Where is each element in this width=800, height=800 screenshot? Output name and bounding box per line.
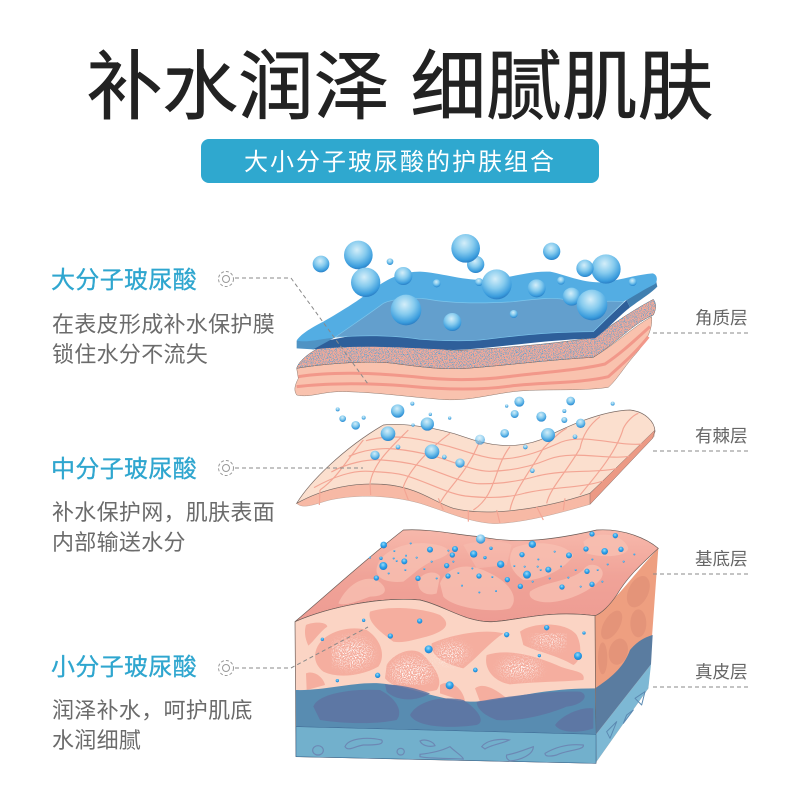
leader line	[235, 467, 363, 469]
layer: spinous layer illustration	[297, 397, 655, 524]
description: large molecule: 锁住水分不流失	[52, 342, 208, 367]
subtitle banner: 大小分子玻尿酸的护肤组合	[244, 149, 556, 176]
blue dermis band	[296, 683, 596, 734]
layer label: basal layer: 基底层	[695, 549, 748, 569]
sheet right edge	[627, 281, 657, 307]
leader target icon	[218, 272, 234, 286]
description: small molecule: 水润细腻	[52, 728, 141, 753]
panel: medium molecule label	[51, 456, 363, 555]
speckled sheet edge	[297, 337, 335, 349]
right cut face	[590, 430, 655, 504]
blue hydration sheet	[297, 272, 657, 341]
dark blue band	[300, 300, 630, 350]
panel: small molecule label	[51, 627, 368, 753]
layer label: spinous layer	[653, 426, 750, 451]
sheet top surface	[297, 410, 655, 512]
layer: basal layer and dermis block	[295, 530, 658, 763]
lower squiggles	[313, 738, 583, 761]
heading: medium molecule: 中分子玻尿酸	[51, 456, 197, 483]
layer label: spinous layer: 有棘层	[695, 426, 748, 446]
description: medium molecule: 补水保护网，肌肤表面	[52, 500, 275, 525]
layer label: dermis: 真皮层	[695, 662, 748, 682]
layer label: dermis	[653, 662, 750, 687]
bubbles: medium molecule	[336, 397, 615, 473]
layer: stratum corneum illustration	[295, 234, 657, 400]
small molecule dots: surface	[369, 531, 635, 593]
layer label: basal layer	[653, 549, 750, 574]
title: 补水润泽 细腻肌肤	[87, 45, 713, 130]
small molecule dots: front face	[321, 618, 586, 689]
heading: small molecule: 小分子玻尿酸	[51, 654, 197, 681]
block front face	[295, 599, 596, 763]
block top surface	[295, 530, 658, 622]
leader line	[235, 278, 368, 384]
leader target icon	[218, 460, 234, 476]
sheet underside	[297, 432, 655, 524]
leader target icon	[218, 660, 234, 676]
description: small molecule: 润泽补水，呵护肌底	[52, 698, 253, 723]
dermis dark cells	[313, 684, 593, 732]
bubbles: large molecule	[313, 234, 637, 331]
layer label: stratum corneum: 角质层	[695, 308, 748, 328]
bottom blue layer	[296, 727, 596, 763]
cell texture	[332, 633, 567, 684]
block right side	[595, 548, 658, 762]
panel: large molecule label	[51, 267, 368, 384]
top surface cells	[338, 535, 628, 610]
heading: large molecule: 大分子玻尿酸	[51, 267, 197, 294]
layer label: stratum corneum	[653, 308, 750, 333]
description: large molecule	[52, 312, 275, 367]
description: large molecule: 在表皮形成补水保护膜	[52, 312, 275, 337]
subtitle banner	[201, 139, 599, 183]
speckled layer	[297, 299, 656, 369]
striped skin layer	[295, 317, 652, 400]
leader line	[235, 627, 368, 668]
translucent inner panel	[335, 298, 624, 341]
description: medium molecule	[52, 500, 275, 555]
description: medium molecule: 内部输送水分	[52, 530, 186, 555]
dermis cells	[305, 608, 584, 702]
description: small molecule	[52, 698, 253, 753]
skin mesh lines	[314, 413, 642, 523]
